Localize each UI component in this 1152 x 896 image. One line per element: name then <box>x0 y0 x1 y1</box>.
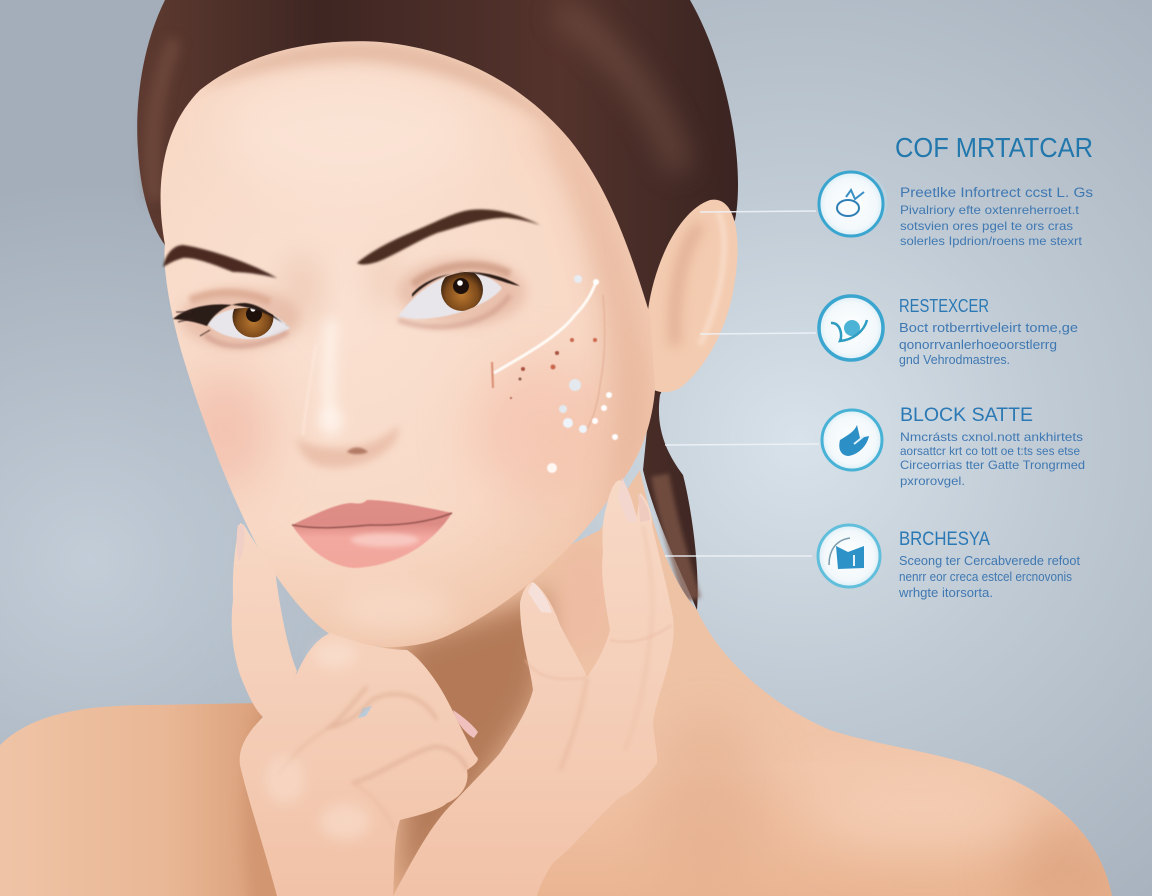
right hand <box>393 478 674 896</box>
text block 3: aorsattcr krt co tott oe t:ts ses etse <box>900 444 1080 458</box>
ear <box>648 200 738 392</box>
text block 2: Boct rotberrtiveleirt tome,ge <box>899 321 1078 335</box>
hair <box>137 0 738 610</box>
left eye <box>173 288 300 348</box>
text block 2 <box>899 296 1078 367</box>
left eyebrow <box>163 245 277 278</box>
skin analysis marks on cheek <box>492 275 618 473</box>
text block 4 <box>898 529 1081 600</box>
nose <box>297 320 398 468</box>
text block 1 <box>900 185 1093 248</box>
text block 1: Preetlke Infortrect ccst L. Gs <box>900 185 1093 200</box>
lips <box>292 500 452 568</box>
text block 1: sotsvien ores pgel te ors cras <box>900 219 1073 233</box>
text block 3: BLOCK SATTE <box>900 405 1033 426</box>
text block 2: qonorrvanlerhoeoorstlerrg <box>899 338 1057 352</box>
face <box>161 41 655 647</box>
text block 4: Sceong ter Cercabverede refoot <box>899 554 1081 568</box>
icon: fourth circle <box>818 525 880 587</box>
neck and right shoulder <box>380 470 1130 896</box>
left hand <box>232 523 478 896</box>
right eyebrow <box>357 209 540 265</box>
icon: third circle <box>822 410 882 470</box>
text block 1: solerles Ipdrion/roens me stexrt <box>900 234 1083 248</box>
connector lines <box>665 211 819 556</box>
text block 3: pxrorovgel. <box>900 474 965 488</box>
text block 3: Nmcrásts cxnol.nott ankhirtets <box>900 430 1083 444</box>
title: COF MRTATCAR <box>895 132 1093 163</box>
text block 3: Circeorrias tter Gatte Trongrmed <box>900 458 1085 472</box>
text block 1: Pivalriory efte oxtenreherroet.t <box>900 203 1080 217</box>
text block 4: wrhgte itorsorta. <box>898 586 993 600</box>
text block 4: BRCHESYA <box>899 529 990 550</box>
text block 2: RESTEXCER <box>899 296 989 316</box>
text block 4: nenrr eor creca estcel ercnovonis <box>899 570 1072 584</box>
text block 3 <box>900 405 1085 488</box>
right eye <box>398 258 526 327</box>
icon: first circle <box>819 172 886 236</box>
text block 2: gnd Vehrodmastres. <box>899 353 1010 367</box>
icon: second circle <box>819 296 883 360</box>
left shoulder <box>0 703 290 896</box>
